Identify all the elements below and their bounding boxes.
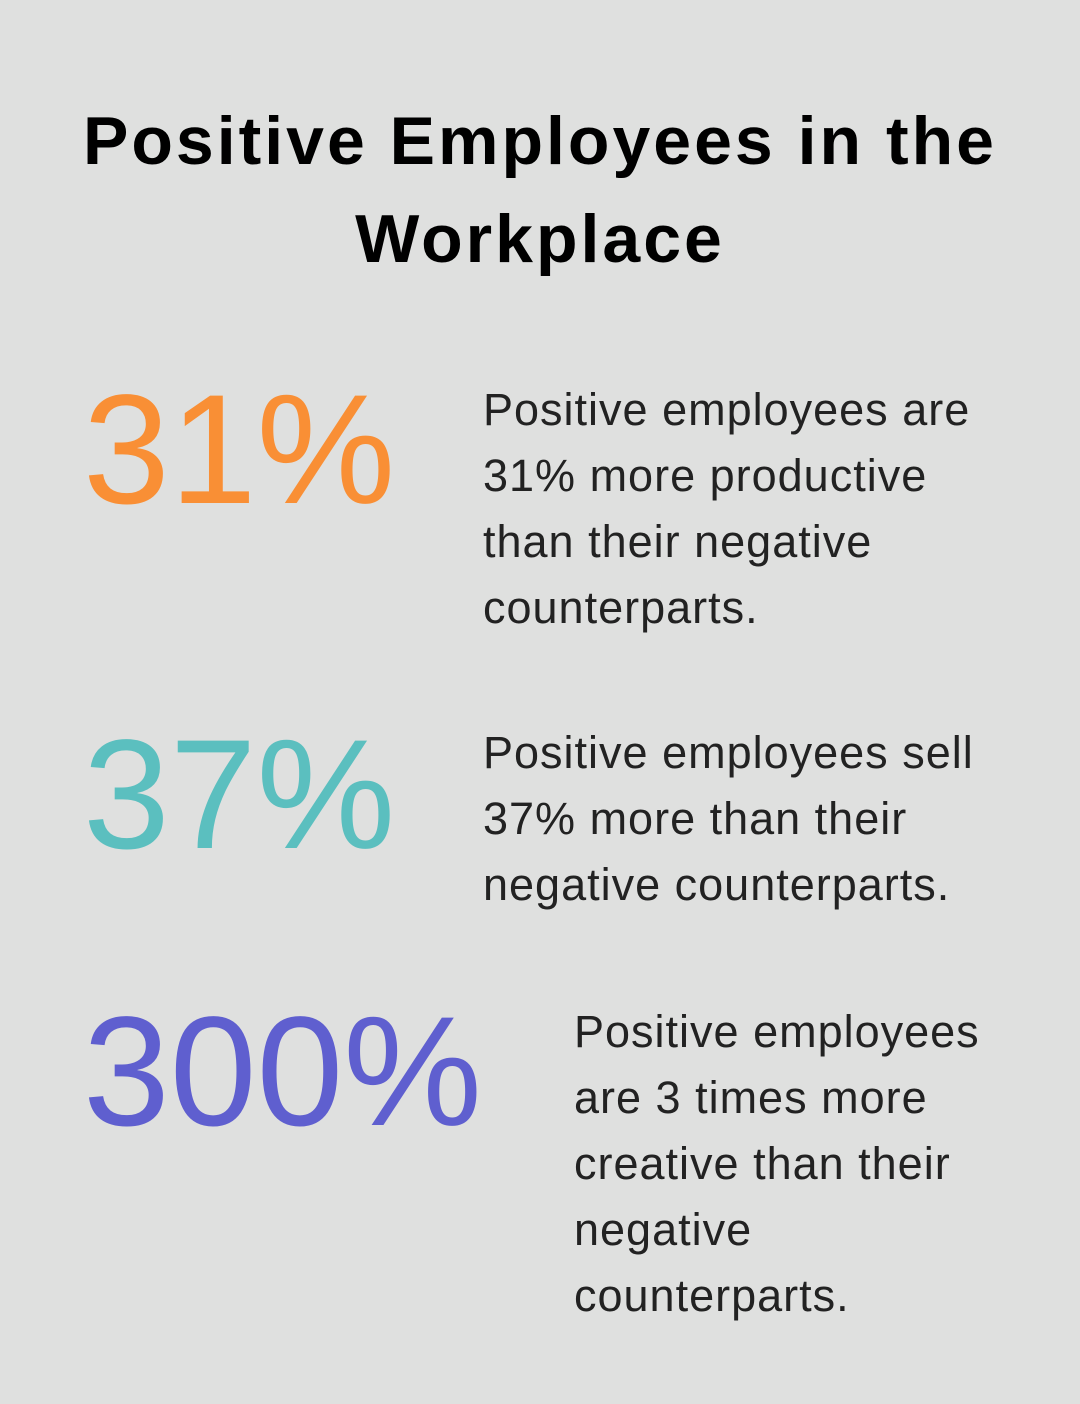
stat 1: description: than their negative [483,516,872,567]
stat 2: number 37%: 37% [83,708,395,882]
stat 2: description: negative counterparts. [483,859,950,910]
stat 3: number 300%: 300% [83,985,482,1159]
stat 3: description [574,1006,980,1321]
stat 3: description: creative than their [574,1138,951,1189]
title [83,103,997,277]
stat 3: description: are 3 times more [574,1072,928,1123]
stat 3: description: negative [574,1204,752,1255]
stat 2: description: Positive employees sell [483,727,974,778]
stat 2: description: 37% more than their [483,793,907,844]
stat 3: description: counterparts. [574,1270,850,1321]
stat 1: number 31%: 31% [83,363,395,537]
stat 2: description [483,727,974,910]
stat 1: description [483,384,970,633]
stat 1: description: 31% more productive [483,450,927,501]
stat 1: description: counterparts. [483,582,759,633]
title: Positive Employees in the [83,103,997,179]
stat 3: description: Positive employees [574,1006,980,1057]
title: Workplace [355,201,725,277]
stat 1: description: Positive employees are [483,384,970,435]
